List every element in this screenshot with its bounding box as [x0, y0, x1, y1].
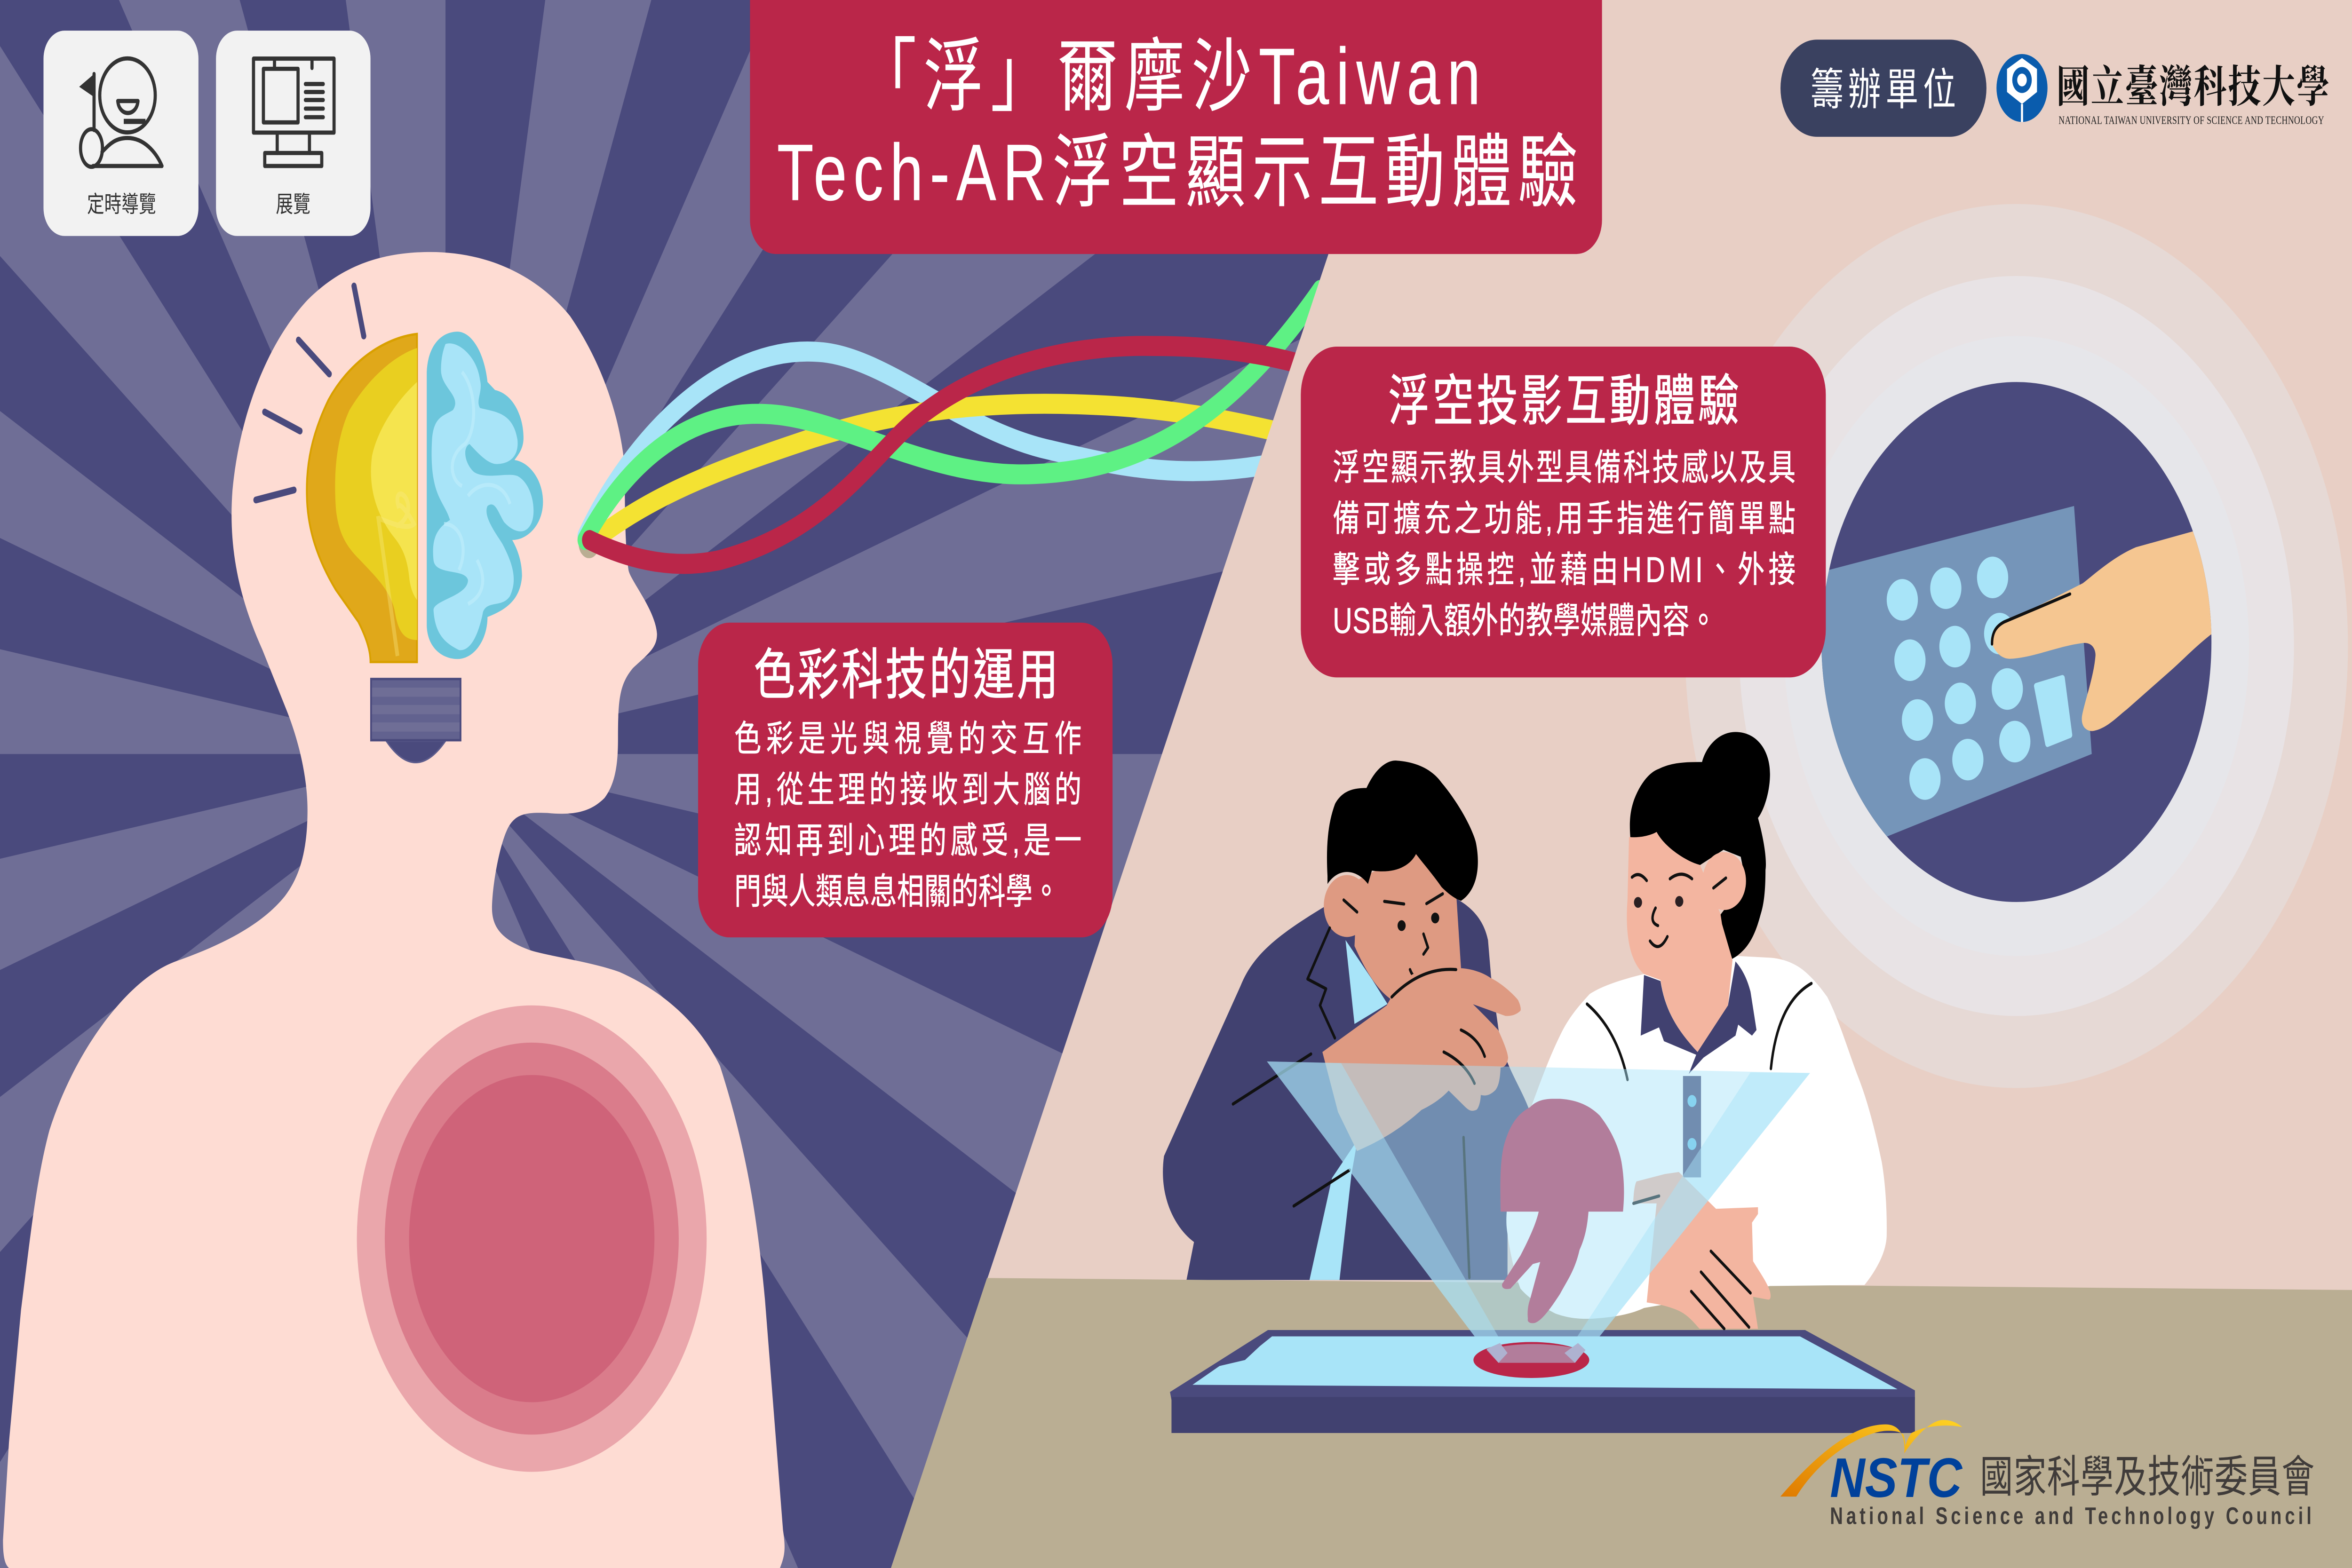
illustration: holographic pyramid [1267, 1061, 1810, 1338]
illustration: finger pressing keypad [1821, 382, 2220, 902]
woman face [1627, 832, 1732, 1052]
woman placket and buttons [1683, 1076, 1701, 1177]
callout body: 色彩是光與視覺的交互作 [734, 719, 1081, 759]
finger [1991, 528, 2220, 731]
device side [1171, 1397, 1915, 1433]
green beam [585, 290, 1320, 540]
callout body: 用,從生理的接收到大腦的 [734, 770, 1081, 810]
NSTC arc emblem [1780, 1420, 1963, 1497]
man face [1354, 850, 1461, 1000]
callout body: 備可擴充之功能,用手指進行簡單點 [1333, 499, 1796, 539]
callout body: 浮空顯示教具外型具備科技感以及具 [1333, 448, 1796, 488]
icon: bulb screw base [371, 679, 461, 762]
red beam [589, 346, 1320, 564]
panel: guided tour card [43, 31, 199, 236]
NTUST emblem [1996, 54, 2048, 122]
callout body [1333, 448, 1796, 641]
callout body: 擊或多點操控,並藉由HDMI、外接 [1333, 550, 1796, 590]
label: 定時導覽 [87, 192, 156, 217]
panel: pink right background [891, 0, 2352, 1568]
icon: brain half [427, 332, 543, 659]
device screen [1192, 1337, 1898, 1389]
illustration: man in suit [1163, 760, 1530, 1280]
woman facial features [1632, 874, 1726, 947]
title line 1: 「浮」爾摩沙Taiwan [857, 32, 1480, 121]
woman sleeve lines [1587, 983, 1812, 1080]
device frame [1170, 1330, 1915, 1400]
badge: organiser label: 籌辦單位 [1811, 65, 1956, 115]
keypad buttons [1887, 556, 2070, 800]
icon: exhibit display [254, 59, 334, 166]
NSTC wordmark: NSTC [1830, 1447, 1963, 1509]
keypad panel [1821, 506, 2092, 864]
blue beam [585, 351, 1290, 536]
callout heading: 浮空投影互動體驗 [1388, 370, 1739, 432]
callout body: 門與人類息息相關的科學。 [734, 872, 1060, 912]
icon: tour guide [79, 58, 162, 167]
logo: NSTC [1780, 1420, 2314, 1529]
icon: concentric rings [1685, 204, 2348, 1088]
man suit lines [1233, 928, 1470, 1278]
man jacket [1163, 860, 1530, 1280]
chart: coloured light beams from the eye [579, 290, 1320, 564]
icon: chest glow circles [357, 1006, 707, 1472]
central pane [1267, 1061, 1810, 1338]
man facial features [1344, 894, 1443, 977]
yellow beam [600, 404, 1305, 536]
callout: floating projection [1301, 347, 1826, 677]
title line 2: Tech-AR浮空顯示互動體驗 [777, 127, 1578, 217]
icon: bulb glow lines [256, 286, 364, 500]
badge: organiser label [1780, 40, 1986, 137]
label: 展覽 [276, 192, 310, 217]
panel: table surface [891, 1278, 2352, 1568]
NSTC English name: National Science and Technology Council [1830, 1502, 2312, 1529]
NSTC Chinese name: 國家科學及技術委員會 [1980, 1452, 2314, 1502]
left face [1267, 1061, 1498, 1338]
woman shirt [1506, 956, 1887, 1319]
woman collar [1641, 961, 1756, 1074]
icon: light bulb half [307, 334, 417, 662]
woman hand [1633, 1172, 1771, 1329]
illustration: floating jellyfish hologram [1500, 1099, 1624, 1323]
NTUST Chinese name: 國立臺灣科技大學 [2057, 63, 2329, 111]
man hair [1327, 760, 1478, 901]
man shirt [1310, 940, 1388, 1280]
illustration: display device [1170, 1330, 1915, 1433]
right face [1577, 1072, 1810, 1337]
panel: exhibition card [216, 31, 371, 236]
callout heading: 色彩科技的運用 [754, 644, 1058, 706]
callout body: 認知再到心理的感受,是一 [734, 821, 1081, 861]
callout body [734, 719, 1081, 912]
figure: head and body silhouette [3, 252, 785, 1568]
callout: colour technology [698, 623, 1112, 937]
woman hair [1630, 732, 1770, 963]
man hand [1322, 967, 1521, 1151]
illustration: woman in white shirt [1506, 732, 1887, 1329]
title banner [750, 0, 1602, 254]
logo: NTUST [1996, 54, 2329, 127]
callout body: USB輸入額外的教學媒體內容。 [1333, 601, 1717, 641]
red projector disc [1473, 1342, 1589, 1378]
NTUST English name: NATIONAL TAIWAN UNIVERSITY OF SCIENCE AND TECHNOLOGY [2058, 114, 2324, 127]
